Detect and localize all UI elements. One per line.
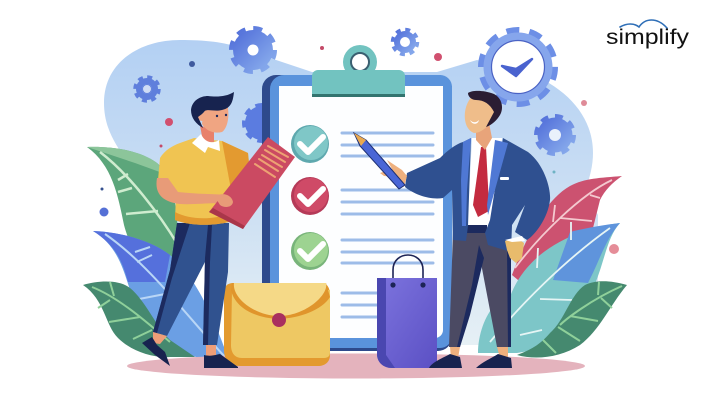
shoes (142, 337, 170, 366)
leaf: left blue (93, 231, 228, 358)
ankles (153, 332, 216, 357)
tie (473, 147, 489, 217)
ankles (450, 347, 508, 358)
document (209, 137, 295, 229)
decorative dots (100, 46, 619, 254)
shirt (158, 138, 250, 225)
leaf: right teal (478, 222, 620, 353)
check: teal (291, 125, 329, 163)
ground shadow (127, 354, 585, 378)
clipboard (262, 45, 452, 351)
hair (191, 92, 234, 128)
leaf: left green (87, 147, 178, 300)
board (262, 75, 452, 351)
gear: right (536, 116, 574, 154)
forearm (156, 178, 229, 204)
shirt and belt (467, 138, 502, 232)
logo cloud arc (620, 20, 667, 28)
person: right man (354, 91, 550, 368)
neck and head (200, 125, 214, 142)
pencil (354, 133, 405, 189)
jacket (405, 138, 471, 241)
raised hand (380, 160, 407, 187)
logo (606, 20, 690, 49)
background blob (104, 40, 598, 345)
right hand (505, 238, 524, 263)
text lines (342, 133, 433, 317)
collar (192, 134, 220, 153)
hand (215, 194, 233, 207)
neck (476, 118, 492, 150)
person: left man (142, 92, 295, 368)
shoes (429, 354, 462, 368)
hair (468, 91, 502, 127)
check: green (291, 232, 329, 270)
leaf: right red (512, 176, 622, 290)
leaf: left dark green (83, 282, 195, 357)
gear: top centre left (232, 28, 274, 72)
gear: behind clipboard (244, 105, 280, 141)
logo wordmark: simplify (606, 26, 690, 49)
gear: large check (481, 30, 555, 104)
trousers (449, 232, 510, 347)
clip (343, 45, 377, 79)
gear: top centre right (392, 30, 418, 54)
gear: upper left small (135, 77, 159, 101)
head (465, 92, 495, 133)
shopping bag (377, 255, 437, 368)
leaf: right dark green (517, 281, 627, 358)
trousers (153, 223, 229, 345)
check: red (291, 177, 329, 215)
envelope bag (224, 283, 330, 366)
